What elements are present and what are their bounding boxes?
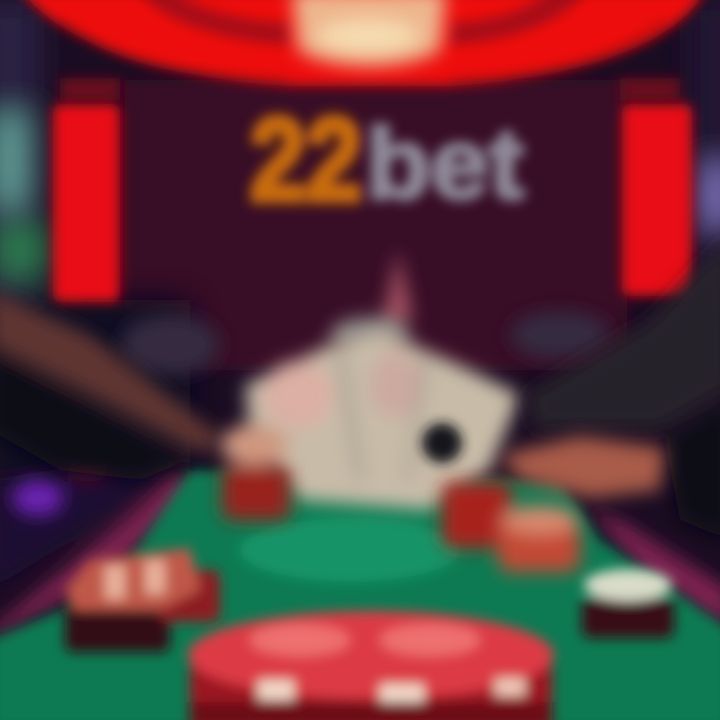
table rail — [0, 450, 720, 640]
black card pip — [422, 423, 462, 463]
chip stack: right centre — [442, 482, 580, 572]
purple glow — [12, 458, 110, 516]
side walls — [0, 0, 720, 480]
curtain backdrop — [118, 80, 628, 370]
red canopy arch — [20, 0, 705, 100]
chip stack: far right — [582, 569, 674, 638]
logo: 22bet — [250, 94, 524, 226]
background silhouettes — [120, 250, 610, 375]
green table — [0, 470, 720, 720]
chip stack: front centre — [188, 611, 554, 720]
playing cards — [245, 330, 520, 510]
chip stack: left centre — [220, 425, 290, 520]
logo: 22bet: 22 — [250, 94, 362, 226]
logo: 22bet: bet — [366, 108, 524, 220]
right hand — [500, 436, 665, 498]
right arm — [525, 235, 720, 540]
left arm — [0, 290, 220, 480]
chip stack: far left — [65, 548, 220, 652]
right red pillar — [622, 104, 692, 296]
canopy lamp — [292, 0, 446, 66]
left red pillar — [53, 104, 120, 302]
